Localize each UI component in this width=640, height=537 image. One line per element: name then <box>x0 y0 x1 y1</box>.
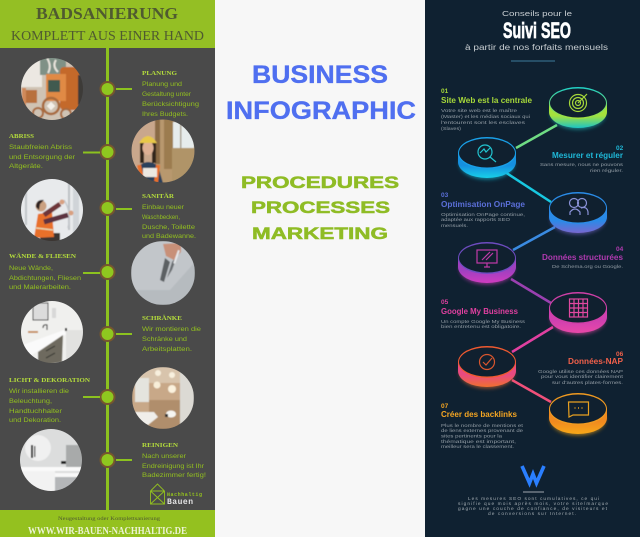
icon: target <box>570 94 587 112</box>
step: Reinigen: Badezimmer fertig! <box>142 472 206 479</box>
tip 03: mensuels. <box>441 223 468 228</box>
step: Licht und Dekoration <box>9 377 90 424</box>
tip 02: Mesurer et réguler <box>552 151 623 160</box>
step: Abriss <box>9 133 76 170</box>
tip 01: 01 <box>441 88 449 95</box>
SEO title block: Conseils pour le <box>502 9 572 18</box>
step: Planung: Berücksichtigung <box>142 101 199 108</box>
tip 05 <box>441 299 526 329</box>
tip 02: rien réguler. <box>590 168 623 173</box>
tip 01: Votre site web est le maître <box>441 108 518 113</box>
step: Planung: Ihres Budgets. <box>142 111 188 118</box>
step: Sanitär: Dusche, Toilette <box>142 224 195 231</box>
ring 5: grid <box>549 292 607 334</box>
centre heading: INFOGRAPHIC <box>226 98 416 125</box>
panel: centre background <box>215 0 425 537</box>
step: Licht und Dekoration: Handtuchhalter <box>9 408 63 415</box>
timeline spine with nodes <box>83 48 132 510</box>
tip 05: Un compte Google My Business <box>441 319 526 324</box>
step: Sanitär: und Badewanne. <box>142 233 196 240</box>
step: Abriss: und Entsorgung der <box>9 154 76 161</box>
closing note: signifie que mois après mois, votre site/marque <box>458 501 608 507</box>
step: Sanitär: SANITÄR <box>142 193 174 200</box>
tip 06 <box>538 351 624 385</box>
photo: tile samples <box>20 57 84 121</box>
tip 03: 03 <box>441 192 449 199</box>
icon: monitor <box>477 250 497 267</box>
panel: bathroom renovation timeline <box>0 0 215 537</box>
ring 3: people <box>549 192 607 234</box>
tip 02: Sans mesure, nous ne pouvons <box>540 162 624 167</box>
closing note <box>458 492 608 517</box>
step: Sanitär <box>142 193 196 240</box>
icon: magnifier chart <box>478 145 496 162</box>
tip 03: adaptée aux rapports SEO <box>441 217 511 222</box>
subtitle: KOMPLETT AUS EINER HAND <box>11 28 204 43</box>
step: Sanitär: Einbau neuer <box>142 204 185 211</box>
title: BADSANIERUNG <box>36 4 178 23</box>
centre keywords: PROCESSES <box>251 198 390 217</box>
step: Reinigen <box>142 442 206 479</box>
tip 03 <box>441 192 526 228</box>
logo: Nachhaltig Bauen: Nachhaltig <box>167 492 202 498</box>
tip 01: Site Web est la centrale <box>441 96 533 105</box>
closing note: Les mesures SEO sont cumulatives, ce qui <box>468 496 599 502</box>
tip 06: pour vous identifier clairement <box>541 374 624 379</box>
step: Schränke: Arbeitsplatten. <box>142 346 192 353</box>
tip 04: Données structurées <box>542 253 624 262</box>
tip 05: Google My Business <box>441 307 519 316</box>
tip 01: (Master) et les médias sociaux qui <box>441 114 530 119</box>
tip 06: 06 <box>616 351 624 358</box>
closing note: gagne une couche de confiance, de visiteurs et <box>458 506 608 512</box>
photo: vanity unit <box>20 300 84 366</box>
footer band: WWW.WIR-BAUEN-NACHHALTIG.DE <box>28 526 187 537</box>
tip 07: thématique est important, <box>441 439 516 444</box>
step: Schränke <box>142 315 201 353</box>
tip 07: 07 <box>441 403 449 410</box>
tip 07: sites pertinents pour la <box>441 434 503 438</box>
logo: W <box>522 466 544 483</box>
tip 01 <box>441 88 533 131</box>
step: Schränke: Schränke und <box>142 336 187 343</box>
ring 6: check <box>458 346 516 388</box>
tip 01: l'entourent sont les esclaves <box>441 120 526 125</box>
step: Wände und Fliesen <box>9 253 81 291</box>
ring 4: monitor <box>458 242 516 284</box>
tip 02: 02 <box>616 145 624 152</box>
SEO title block: à partir de nos forfaits mensuels <box>465 43 608 52</box>
step: Wände und Fliesen: Neue Wände, <box>9 265 53 272</box>
tip 06: sur d'autres plates-formes. <box>552 380 623 385</box>
centre keywords <box>241 173 399 243</box>
logo: Nachhaltig Bauen: Bauen <box>167 498 193 507</box>
footer band: Neugestaltung oder Komplettsanierung <box>58 516 160 522</box>
icon: grid <box>570 299 588 317</box>
centre heading: BUSINESS <box>252 62 388 89</box>
photo: warm lit bathroom <box>132 367 194 429</box>
tip 02 <box>540 145 624 173</box>
photo: plumber in orange vest <box>20 178 84 243</box>
tip 04 <box>542 246 624 269</box>
step: Planung <box>142 70 199 118</box>
step: Reinigen: Endreinigung ist Ihr <box>142 463 205 470</box>
step: Schränke: Wir montieren die <box>142 326 201 333</box>
step: Abriss: ABRISS <box>9 133 34 140</box>
step: Planung: Gestaltung unter <box>142 91 192 98</box>
step: Licht und Dekoration: und Dekoration. <box>9 417 61 424</box>
photo: engineer with helmet <box>131 119 195 183</box>
tip 04: De Schema.org ou Google. <box>552 264 623 269</box>
ring 1: target <box>549 87 607 129</box>
tip 07: de liens externes provenant de <box>441 428 524 433</box>
tip 06: Données-NAP <box>568 357 624 366</box>
tip 03: Optimisation OnPage <box>441 200 526 209</box>
tip 07: meilleur sera le classement. <box>441 444 514 449</box>
centre keywords: MARKETING <box>252 224 388 243</box>
connectors between rings <box>505 125 557 402</box>
tip 01: (Slaves) <box>441 126 462 131</box>
centre heading <box>226 62 416 125</box>
step: Wände und Fliesen: Abdichtungen, Fliesen <box>9 275 81 282</box>
step: Planung: PLANUNG <box>142 70 177 77</box>
ring 7: chat <box>549 393 607 435</box>
tip 06: Google utilise ces données NAP <box>538 369 623 374</box>
icon: check badge <box>480 354 494 370</box>
panel: SEO tips <box>425 0 640 537</box>
tip 04: 04 <box>616 246 624 253</box>
closing note: de conversions sur Internet. <box>488 511 576 517</box>
step: Abriss: Staubfreien Abriss <box>9 144 73 151</box>
step: Licht und Dekoration: Beleuchtung, <box>9 398 52 405</box>
tip 05: bien entretenu est obligatoire. <box>441 324 521 329</box>
ring 2: analytics <box>458 137 516 179</box>
step: Reinigen: Nach unserer <box>142 453 187 460</box>
step: Abriss: Altgeräte. <box>9 163 43 170</box>
step: Licht und Dekoration: Wir installieren die <box>9 388 69 395</box>
icon: chat bubble <box>568 402 588 417</box>
icon: people <box>570 198 588 215</box>
step: Sanitär: Waschbecken, <box>142 214 180 221</box>
tip 05: 05 <box>441 299 449 306</box>
tip 03: Optimisation OnPage continue, <box>441 212 525 217</box>
photo: white washbasin <box>19 428 83 492</box>
centre keywords: PROCEDURES <box>241 173 399 192</box>
tip 07: Plus le nombre de mentions et <box>441 423 524 428</box>
tip 07: Créer des backlinks <box>441 410 518 419</box>
step: Planung: Planung und <box>142 81 182 88</box>
logo: Nachhaltig Bauen <box>150 484 202 507</box>
tip 07 <box>441 403 524 449</box>
step: Reinigen: REINIGEN <box>142 442 178 449</box>
step: Wände und Fliesen: WÄNDE & FLIESEN <box>9 253 76 260</box>
step: Schränke: SCHRÄNKE <box>142 315 183 322</box>
SEO title block: Suivi SEO <box>503 18 571 43</box>
header band <box>0 0 215 48</box>
step: Wände und Fliesen: und Malerarbeiten. <box>9 284 71 291</box>
SEO title block <box>465 9 608 62</box>
step: Licht und Dekoration: LICHT & DEKORATION <box>9 377 90 384</box>
photo: trowel on grey tile <box>131 241 195 305</box>
footer band <box>0 510 215 537</box>
